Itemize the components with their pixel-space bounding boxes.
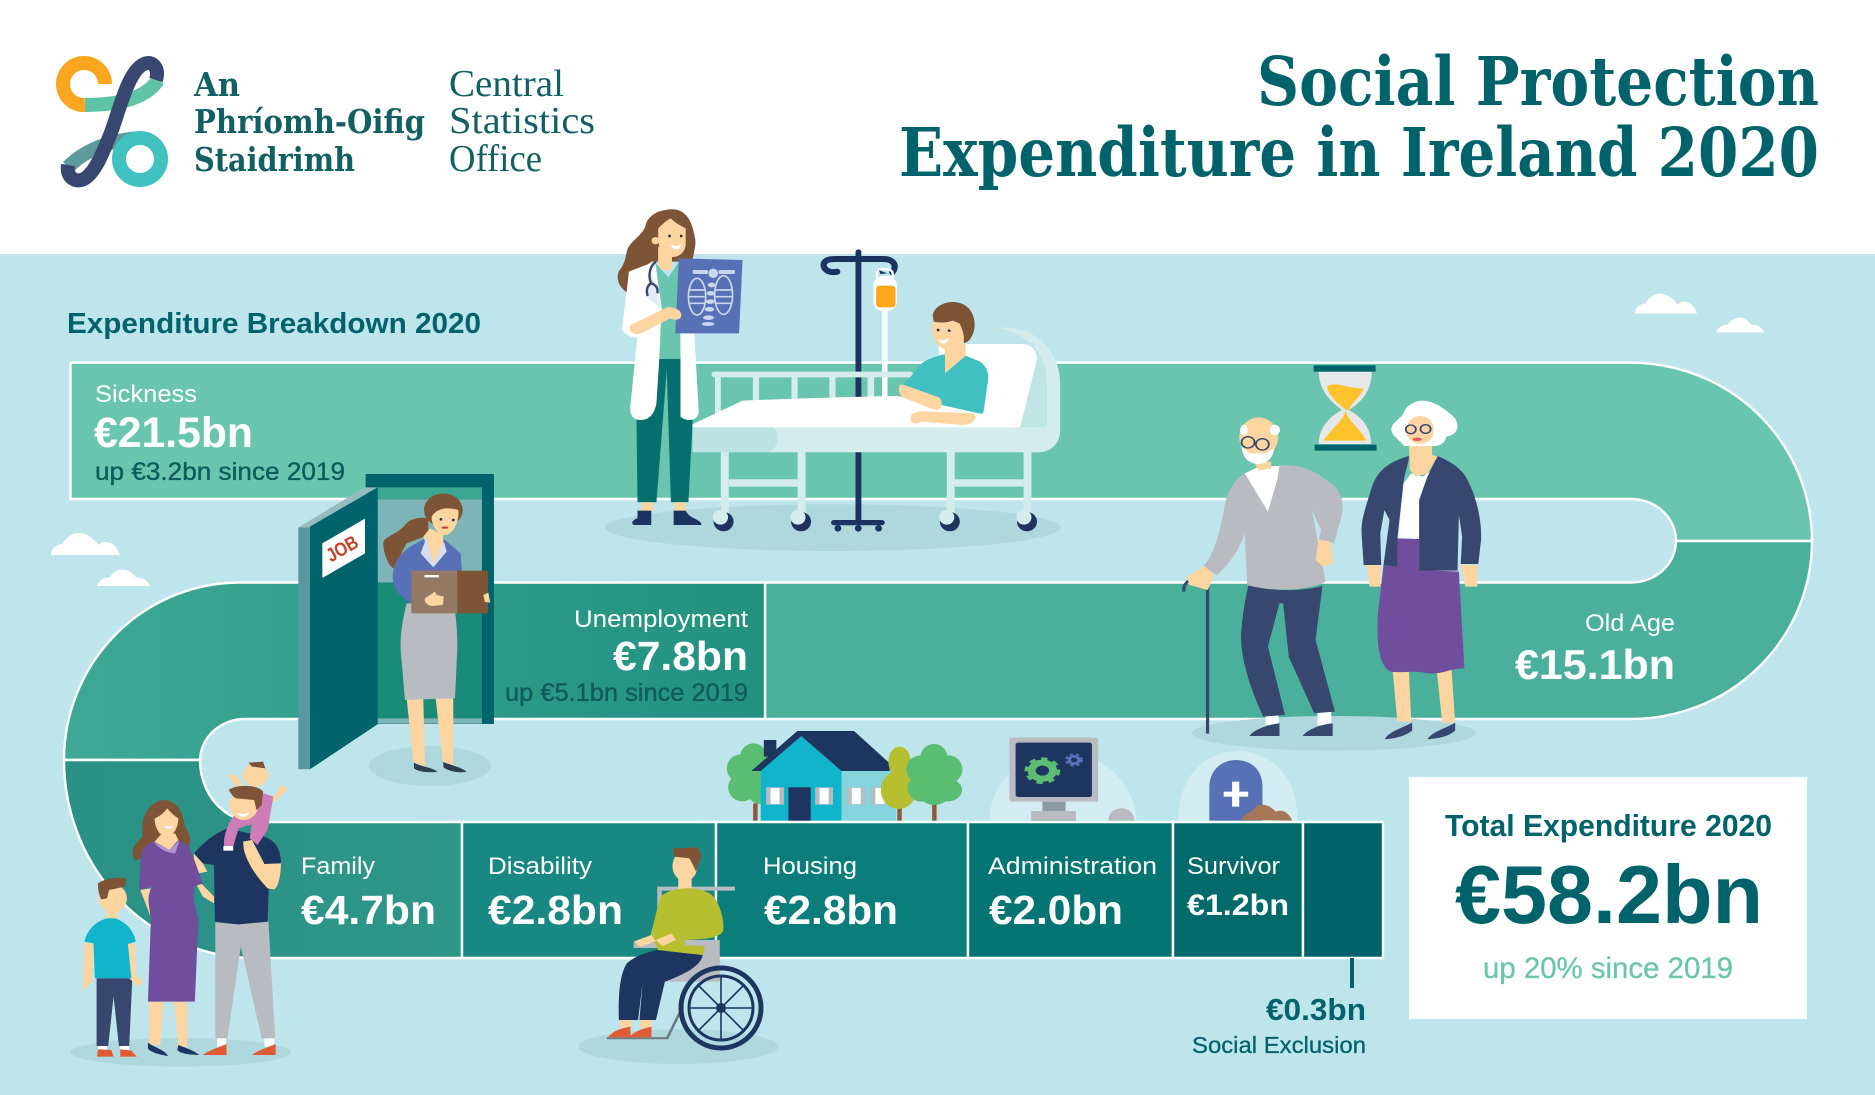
label: survivor <box>1187 853 1289 922</box>
label: sickness: up €3.2bn since 2019 <box>95 458 345 486</box>
title <box>899 42 1819 192</box>
label: old age <box>1515 610 1675 688</box>
clouds <box>51 294 1764 586</box>
label: old age: €15.1bn <box>1515 641 1675 688</box>
panel: total expenditure <box>1409 777 1807 1019</box>
segment: family <box>64 760 462 958</box>
logo <box>63 63 595 180</box>
label: old age: Old Age <box>1585 610 1675 637</box>
label: administration: Administration <box>988 853 1157 880</box>
label: housing <box>763 853 898 933</box>
hourglass <box>1314 365 1377 451</box>
label: administration <box>988 853 1157 933</box>
connector: social exclusion <box>1350 958 1354 988</box>
label: unemployment: Unemployment <box>574 606 748 633</box>
icon: computer <box>989 738 1137 821</box>
label: social exclusion: €0.3bn <box>1266 992 1366 1027</box>
label: family: €4.7bn <box>301 887 436 933</box>
segment: administration <box>968 822 1173 958</box>
baby <box>223 762 289 851</box>
label: unemployment: €7.8bn <box>613 633 748 679</box>
old man <box>1184 417 1343 736</box>
label: disability: €2.8bn <box>488 887 623 933</box>
segment: social exclusion <box>1303 822 1383 958</box>
heading: expenditure breakdown: Expenditure Breakdown 2020 <box>67 308 481 340</box>
logo text: Irish: An <box>193 65 240 104</box>
house <box>727 731 962 821</box>
door <box>298 487 378 769</box>
logo text: English: Office <box>449 138 542 180</box>
background band <box>0 254 1875 1095</box>
label: administration: €2.0bn <box>989 887 1123 933</box>
old woman <box>1362 401 1481 739</box>
segment: old age <box>765 541 1812 719</box>
woman <box>383 493 490 772</box>
segment: disability <box>462 822 716 958</box>
label: social exclusion: Social Exclusion <box>1192 1032 1366 1058</box>
doctor <box>618 209 701 525</box>
label: family: Family <box>301 853 375 880</box>
panel: total expenditure: up 20% since 2019 <box>1483 952 1733 985</box>
label: housing: Housing <box>763 853 857 880</box>
logo text: Irish <box>193 65 425 179</box>
segment: survivor <box>1173 822 1303 958</box>
label: disability <box>488 853 623 933</box>
panel: total expenditure: Total Expenditure 2020 <box>1445 808 1772 843</box>
illustration: house and icons <box>727 731 1297 821</box>
x-ray <box>675 258 743 333</box>
mother <box>132 800 214 1056</box>
door: JOB <box>323 532 362 567</box>
label: family <box>301 853 436 933</box>
label: unemployment: up €5.1bn since 2019 <box>505 679 748 707</box>
segment: sickness <box>70 363 1812 541</box>
label: disability: Disability <box>488 853 592 880</box>
illustration: elderly couple <box>1184 365 1481 751</box>
label: survivor: Survivor <box>1187 853 1280 880</box>
illustration: job door and woman <box>298 474 494 786</box>
bed <box>693 328 1060 531</box>
door frame <box>366 474 494 724</box>
panel: total expenditure: €58.2bn <box>1455 848 1763 941</box>
expenditure track <box>64 363 1812 958</box>
patient <box>899 302 988 425</box>
wheelchair user <box>578 847 778 1064</box>
label: sickness: Sickness <box>95 381 197 408</box>
boy <box>82 878 143 1057</box>
label: unemployment <box>505 606 748 707</box>
logo text: English: Central <box>449 63 564 105</box>
man <box>194 762 289 1055</box>
segment: housing <box>716 822 968 958</box>
logo text: English <box>449 63 595 180</box>
logo text: Irish: Staidrimh <box>194 140 355 179</box>
label: housing: €2.8bn <box>764 887 898 933</box>
label: sickness: €21.5bn <box>94 409 253 457</box>
segment: unemployment <box>64 582 765 760</box>
label: sickness <box>94 381 345 486</box>
label: social exclusion <box>1192 992 1366 1058</box>
icon: wheelchair wheel <box>681 968 761 1048</box>
illustration: hospital <box>605 209 1061 551</box>
logo text: Irish: Phríomh-Oifig <box>194 102 425 141</box>
illustration: family <box>70 762 778 1067</box>
label: survivor: €1.2bn <box>1187 889 1289 922</box>
logo text: English: Statistics <box>449 100 595 142</box>
icon: gravestone <box>1179 751 1297 821</box>
IV pole <box>824 249 897 532</box>
